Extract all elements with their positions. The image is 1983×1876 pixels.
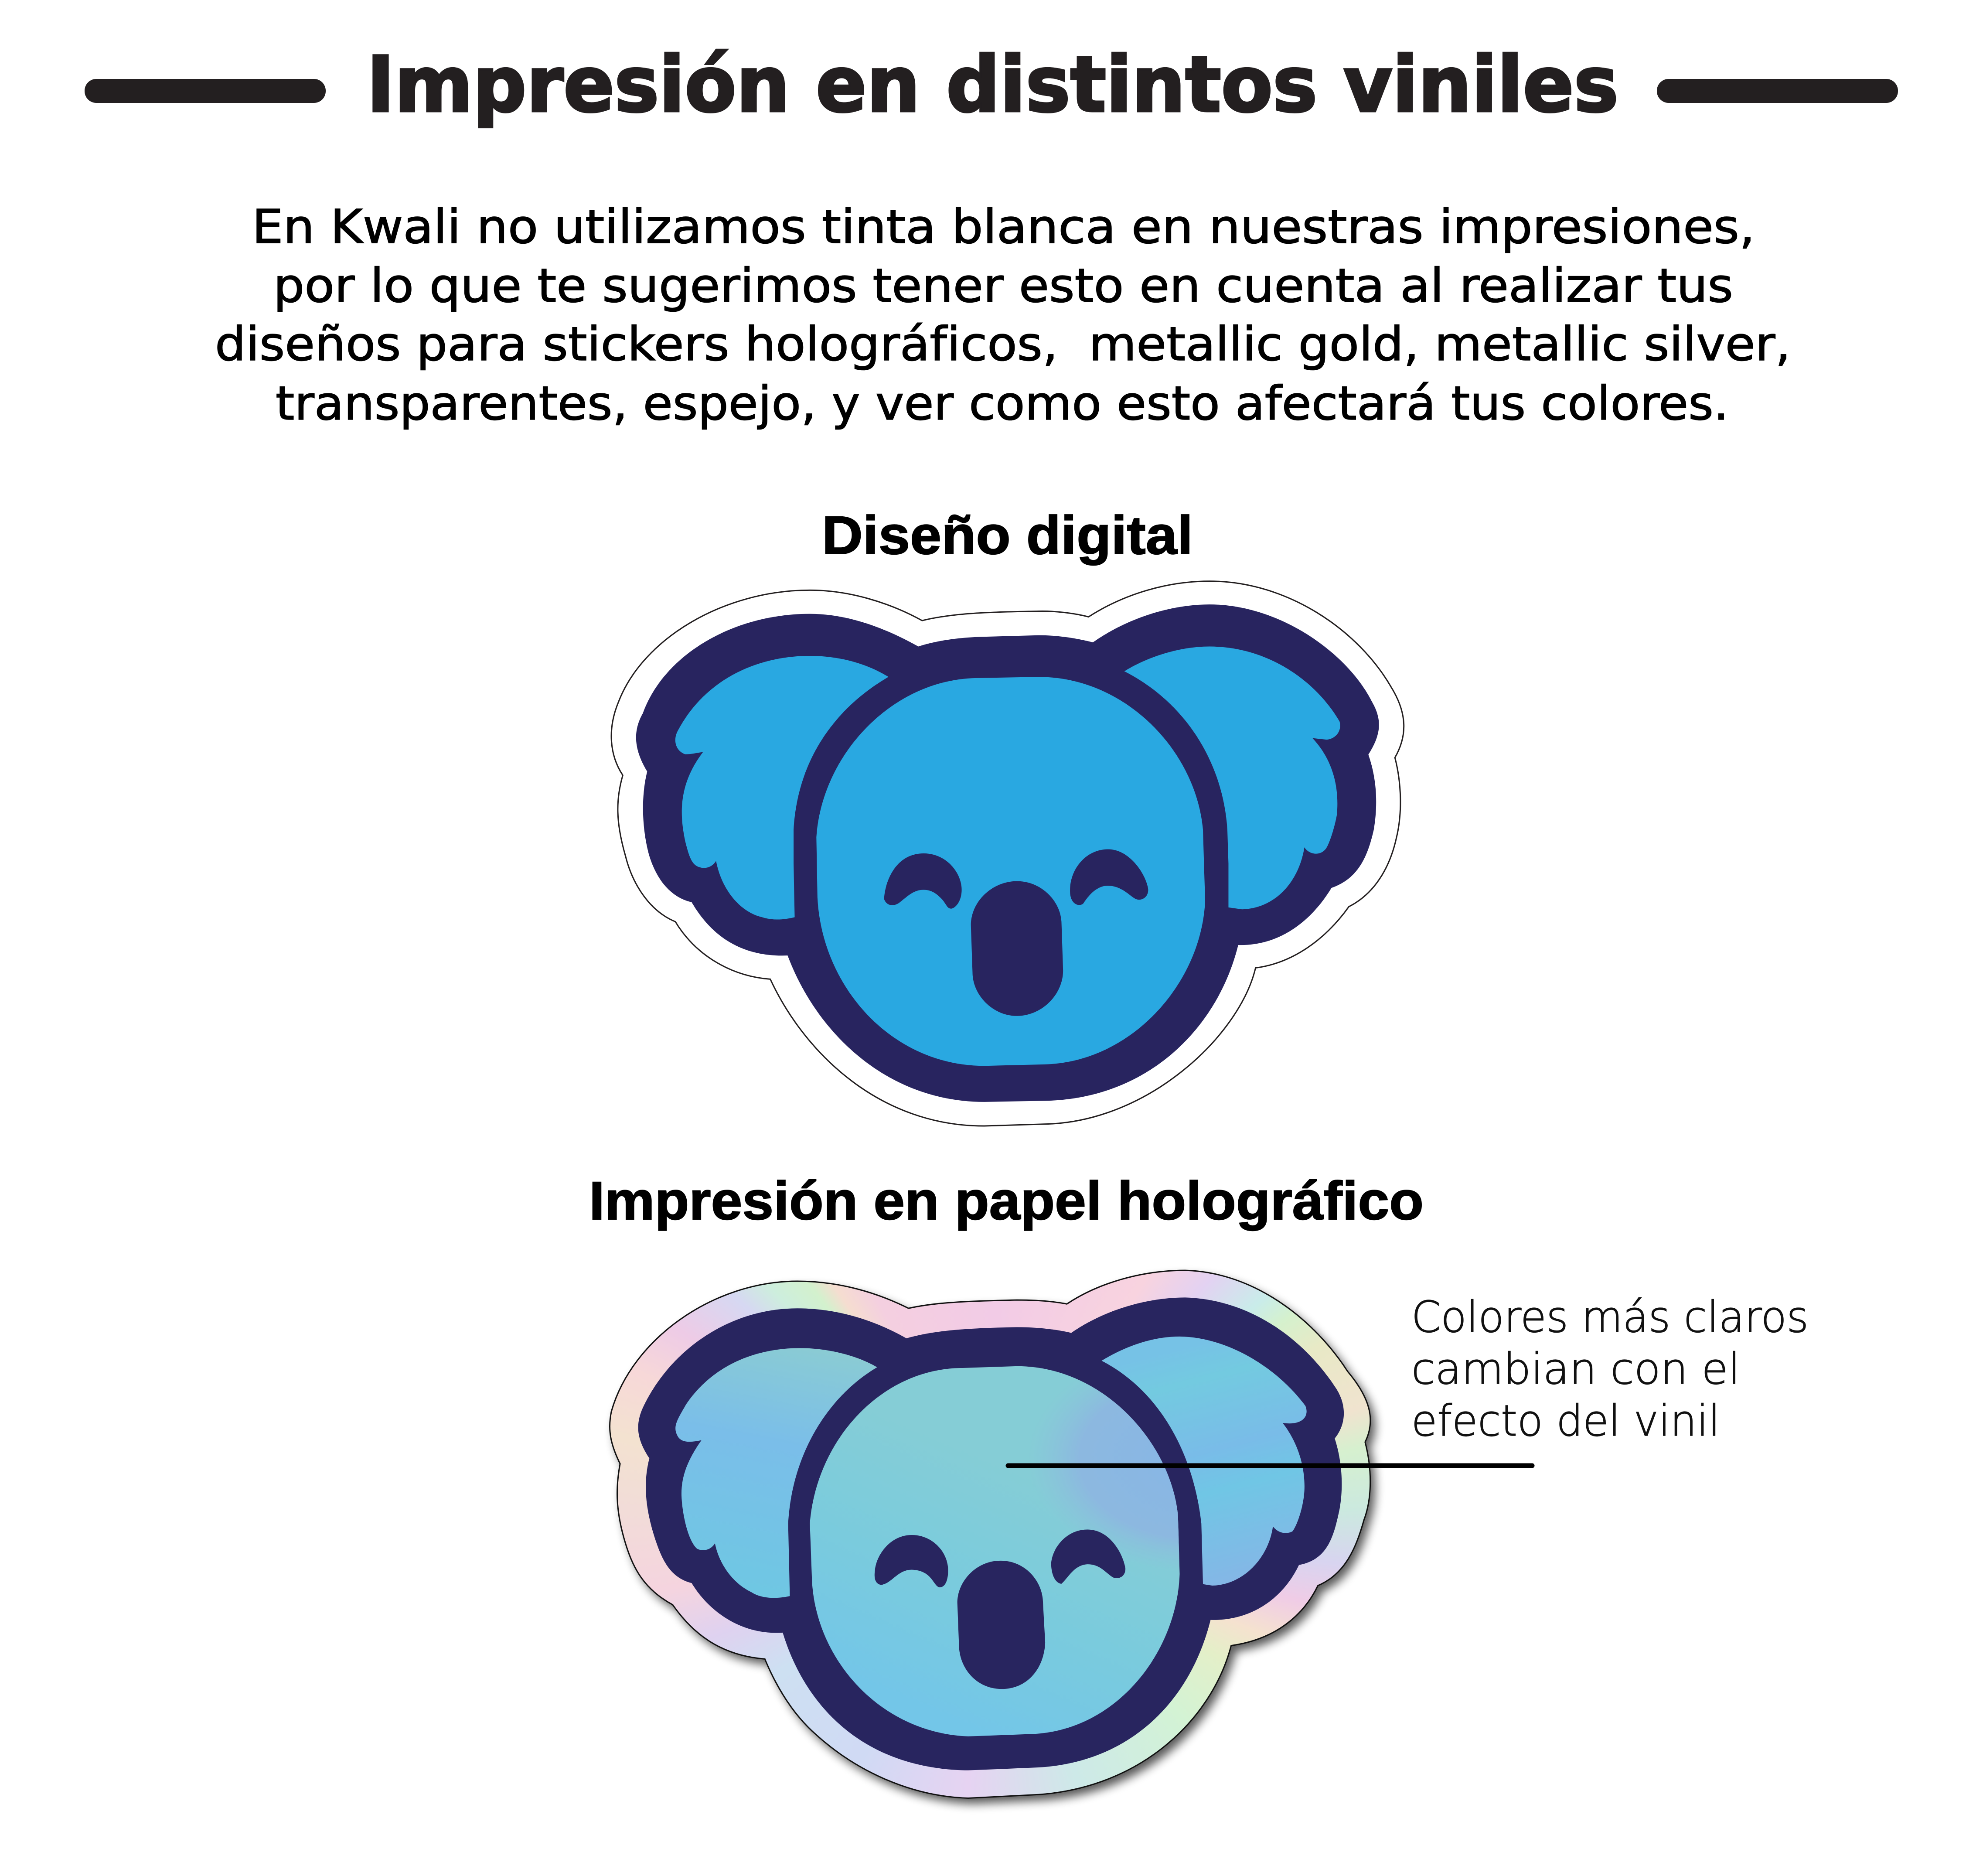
heading: impresión en papel holográfico: Impresión en papel holográfico <box>589 1171 1424 1231</box>
left ear <box>675 1348 877 1598</box>
intro paragraph: transparentes, espejo, y ver como esto afectará tus colores. <box>276 377 1729 431</box>
nose <box>957 1561 1045 1689</box>
intro paragraph: por lo que te sugerimos tener esto en cuenta al realizar tus <box>273 259 1733 313</box>
holographic border <box>610 1271 1370 1798</box>
right ear <box>1124 647 1340 909</box>
title bar right <box>1657 79 1898 103</box>
right ear <box>1101 1337 1307 1586</box>
face <box>816 677 1205 1066</box>
intro paragraph: En Kwali no utilizamos tinta blanca en nuestras impresiones, <box>252 200 1755 254</box>
callout text <box>1411 1293 1809 1446</box>
drop shadow <box>615 1276 1375 1804</box>
left eye <box>875 1535 948 1587</box>
callout text: cambian con el <box>1411 1344 1740 1394</box>
icon: holographic koala sticker <box>607 1269 1383 1811</box>
intro paragraph <box>215 200 1791 431</box>
callout text: efecto del vinil <box>1411 1396 1720 1446</box>
callout leader line <box>1008 1463 1532 1468</box>
title: Impresión en distintos viniles <box>367 40 1618 130</box>
right eye <box>1051 1530 1125 1584</box>
navy silhouette <box>638 1297 1344 1770</box>
callout text: Colores más claros <box>1411 1293 1809 1342</box>
icon: digital koala sticker <box>611 581 1404 1126</box>
navy silhouette <box>636 604 1379 1102</box>
heading: diseño digital: Diseño digital <box>822 505 1193 566</box>
die-cut outline <box>611 581 1404 1126</box>
intro paragraph: diseños para stickers holográficos, metallic gold, metallic silver, <box>215 317 1791 372</box>
right eye <box>1070 849 1148 905</box>
title bar left <box>85 79 326 103</box>
left ear <box>675 656 889 919</box>
die-cut outline <box>610 1270 1370 1798</box>
nose <box>971 881 1063 1016</box>
face <box>810 1366 1180 1736</box>
left eye <box>884 853 962 909</box>
